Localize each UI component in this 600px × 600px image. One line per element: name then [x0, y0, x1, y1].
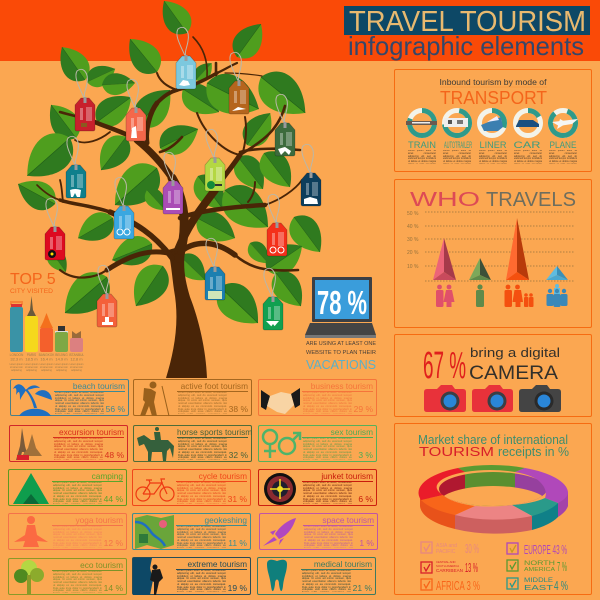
card: camping	[8, 469, 127, 506]
card: active foot tourism: 38 %	[229, 404, 248, 414]
card: extreme tourism: 19 %	[228, 583, 247, 593]
laptop callout: VACATIONS	[306, 357, 376, 372]
top 5 city labels: 18.5 m	[25, 356, 38, 362]
top 5 city labels: adipiscing	[71, 369, 82, 372]
market heading: receipts in %	[498, 444, 568, 458]
card: active foot tourism	[133, 379, 252, 416]
percent axis: 20 %	[406, 250, 418, 256]
camera icons	[424, 384, 560, 412]
panel: transport	[394, 69, 592, 172]
top 5 city labels: adipiscing	[41, 369, 52, 372]
card: beach tourism: beach tourism	[73, 380, 125, 390]
card: yoga tourism: yoga tourism	[76, 514, 123, 524]
pyramid chart	[432, 218, 568, 280]
card: sex tourism	[258, 425, 377, 462]
title text	[348, 6, 586, 61]
card: eco tourism	[8, 558, 127, 595]
panel: who travels	[394, 179, 592, 328]
legend labels: AFRICA 3 %	[436, 578, 480, 592]
card: excursion tourism: excursion tourism	[59, 426, 124, 436]
legend labels: ASIA and	[436, 542, 457, 548]
top band	[0, 0, 600, 61]
card: geokeshing	[132, 513, 251, 550]
card: yoga tourism	[8, 513, 127, 550]
card: camping: 44 %	[104, 494, 123, 504]
card: junket tourism	[258, 469, 377, 506]
legend labels: NORTH	[524, 560, 554, 566]
legend labels: CENTRAL AND	[436, 560, 455, 564]
title	[344, 6, 590, 35]
card: sex tourism: sex tourism	[331, 426, 373, 436]
legend labels: AMERICA	[524, 566, 555, 572]
card: geokeshing: geokeshing	[205, 514, 247, 524]
who travels heading	[410, 188, 576, 210]
leaves	[11, 0, 332, 336]
legend labels: 13 %	[464, 560, 478, 574]
card: cycle tourism: cycle tourism	[199, 470, 247, 480]
top 5 city labels: sit amet con	[25, 366, 39, 369]
top 5 city labels: PARIS	[27, 353, 36, 357]
title text: infographic elements	[348, 31, 584, 61]
percent axis: 30 %	[406, 236, 418, 242]
legend labels	[436, 540, 568, 592]
transport labels: LINER	[479, 140, 507, 150]
transport labels	[408, 140, 576, 150]
people icons	[436, 284, 567, 306]
legend	[420, 542, 518, 590]
card: space tourism	[259, 513, 378, 550]
top 5 city labels: sit amet con	[55, 366, 69, 369]
top 5 city labels: adipiscing	[26, 369, 37, 372]
who travels heading: WHO	[410, 188, 480, 210]
top 5 city labels: adipiscing	[56, 369, 67, 372]
top 5 city labels: 12.8 m	[70, 356, 83, 362]
card: horse sports tourism	[133, 425, 252, 462]
top 5 city labels: ISTANBUL	[69, 353, 84, 357]
top 5 city labels: BEIJING	[55, 353, 68, 357]
card: geokeshing: 11 %	[228, 538, 247, 548]
card: medical tourism: medical tourism	[314, 558, 372, 568]
card: yoga tourism: 12 %	[104, 538, 123, 548]
card: cycle tourism	[132, 469, 251, 506]
card: space tourism: space tourism	[322, 514, 374, 524]
legend labels: EAST	[524, 582, 553, 592]
card: eco tourism: eco tourism	[80, 560, 123, 570]
top 5 city labels: Lorem ipsum	[70, 363, 83, 366]
card: medical tourism	[257, 557, 376, 595]
top 5 city labels: 32.3 m	[10, 356, 23, 362]
top 5 city labels: Lorem ipsum	[40, 363, 53, 366]
transport labels: TRAIN	[408, 140, 436, 150]
trunk and branches	[37, 37, 302, 378]
top 5 heading: TOP 5	[10, 271, 56, 288]
title text: TRAVEL TOURISM	[349, 6, 586, 38]
card: active foot tourism: active foot tourism	[181, 380, 248, 390]
legend labels: CARRIBEAN	[436, 568, 462, 572]
card: business tourism: 29 %	[354, 404, 373, 414]
card: extreme tourism: extreme tourism	[188, 558, 247, 568]
top 5 heading: CITY VISITED	[10, 288, 53, 295]
top 5 bars	[10, 296, 83, 352]
card: junket tourism: junket tourism	[321, 470, 373, 480]
transport heading: TRANSPORT	[440, 88, 546, 108]
top 5 city labels: adipiscing	[11, 369, 22, 372]
card: space tourism: 1 %	[359, 538, 374, 548]
top 5 city labels: sit amet con	[10, 366, 24, 369]
transport labels: CAR	[513, 140, 541, 150]
camera stat: bring a digital	[470, 344, 560, 360]
card: eco tourism: 14 %	[104, 583, 123, 593]
transport heading	[439, 78, 547, 108]
transport labels: PLANE	[549, 140, 576, 150]
legend labels: SOUTH AMERICA	[436, 564, 459, 568]
percent axis: 10 %	[406, 264, 418, 270]
laptop callout: ARE USING AT LEAST ONE	[306, 341, 376, 347]
3d donut chart	[418, 464, 568, 533]
donut icons	[409, 106, 579, 139]
laptop callout: WEBSITE TO PLAN THEIR	[306, 350, 376, 356]
laptop callout	[305, 277, 376, 372]
top 5 city labels	[10, 353, 84, 372]
card: camping: camping	[92, 470, 123, 480]
vehicle icons	[406, 116, 578, 130]
top 5 city labels: Lorem ipsum	[10, 363, 23, 366]
panel: market share	[394, 423, 592, 595]
card: excursion tourism	[9, 425, 128, 462]
laptop callout: 78 %	[317, 284, 367, 321]
transport descriptions	[408, 150, 577, 164]
top 5 city labels: 14.9 m	[55, 356, 68, 362]
card: business tourism	[258, 379, 377, 416]
card: extreme tourism	[132, 557, 251, 595]
legend labels: 4 %	[554, 578, 568, 592]
percent axis: 50 %	[406, 210, 418, 216]
camera stat	[422, 344, 560, 386]
top 5 city labels: LONDON	[10, 353, 24, 357]
camera stat: CAMERA	[468, 362, 558, 384]
card: beach tourism: 56 %	[106, 404, 125, 414]
market heading	[418, 432, 568, 458]
transport heading: Inbound tourism by mode of	[439, 78, 547, 86]
card: medical tourism: 21 %	[353, 583, 372, 593]
transport labels: AUTOTRAILER	[444, 140, 472, 150]
card: sex tourism: 3 %	[358, 450, 373, 460]
tags	[45, 27, 321, 330]
legend labels: PACIFIC	[436, 548, 455, 554]
card: horse sports tourism: horse sports tourism	[177, 426, 252, 436]
top 5 city labels: Lorem ipsum	[25, 363, 38, 366]
market heading: Market share of international	[418, 432, 568, 446]
top 5 city labels: sit amet con	[40, 366, 54, 369]
panel: camera	[394, 334, 592, 417]
legend labels: MIDDLE	[524, 576, 553, 584]
card: cycle tourism: 31 %	[228, 494, 247, 504]
top 5 city labels: 16.4 m	[40, 356, 53, 362]
legend labels: 7 %	[556, 558, 567, 574]
who travels heading: TRAVELS	[486, 188, 576, 210]
card: beach tourism	[10, 379, 129, 416]
market heading: TOURISM	[418, 444, 494, 458]
legend labels: 30 %	[464, 540, 479, 556]
camera stat: 67 %	[422, 344, 466, 386]
percent axis: 40 %	[406, 224, 418, 230]
card: excursion tourism: 48 %	[105, 450, 124, 460]
card: junket tourism: 6 %	[358, 494, 373, 504]
card: horse sports tourism: 32 %	[229, 450, 248, 460]
card: business tourism: business tourism	[311, 380, 373, 390]
percent axis	[406, 210, 418, 270]
top 5 city labels: BANGKOK	[39, 353, 55, 357]
top 5 city labels: sit amet con	[70, 366, 84, 369]
top 5 city labels: Lorem ipsum	[55, 363, 68, 366]
